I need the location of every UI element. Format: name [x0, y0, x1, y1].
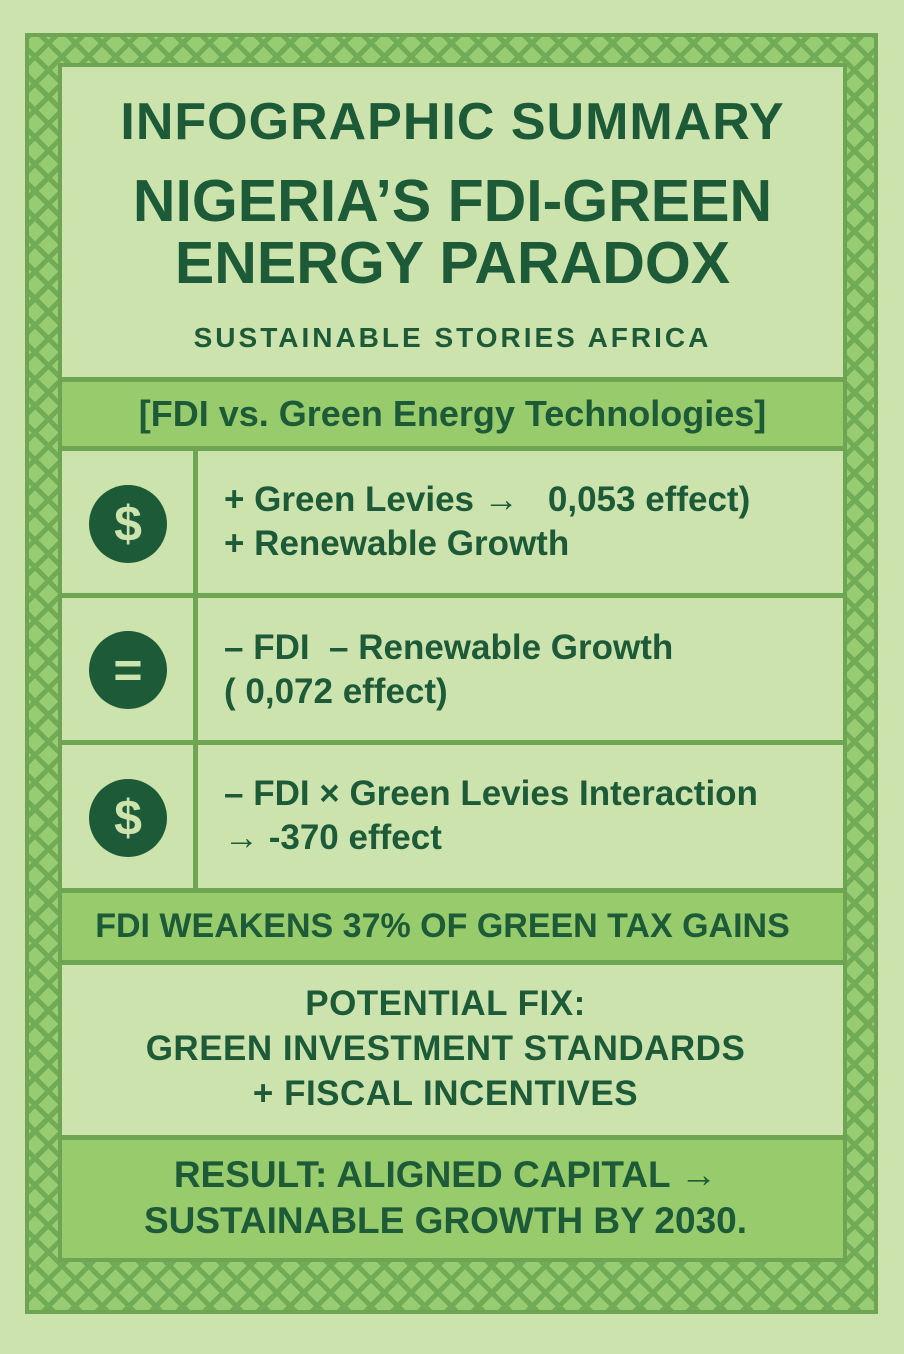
text row 3: → -370 effect [224, 818, 442, 857]
potential fix text [146, 984, 745, 1113]
text row 1: + Renewable Growth [224, 524, 569, 563]
heading: main title: NIGERIA’S FDI-GREEN [133, 168, 772, 234]
subtitle: SUSTAINABLE STORIES AFRICA [194, 322, 711, 353]
text row 2: ( 0,072 effect) [224, 672, 448, 711]
icon: dollar [89, 779, 167, 857]
text row 2 [224, 628, 673, 711]
main panel [58, 63, 847, 1262]
text row 1: + Green Levies → 0,053 effect) [224, 480, 750, 519]
heading: infographic summary: INFOGRAPHIC SUMMARY [120, 93, 785, 151]
result band: SUSTAINABLE GROWTH BY 2030. [144, 1200, 747, 1241]
text row 3 [224, 774, 758, 857]
callout: FDI weakens: FDI WEAKENS 37% OF GREEN TAX GAINS [95, 907, 790, 945]
heading: main title [133, 168, 772, 296]
potential fix text: + FISCAL INCENTIVES [253, 1074, 638, 1113]
icon: dollar [89, 485, 167, 563]
title block [120, 93, 785, 353]
row 3 [89, 774, 758, 857]
header band [62, 382, 843, 446]
icon: equals [89, 631, 167, 709]
text row 2: – FDI – Renewable Growth [224, 628, 673, 667]
row 1 [89, 480, 750, 563]
potential fix text: POTENTIAL FIX: [305, 984, 586, 1023]
potential fix text: GREEN INVESTMENT STANDARDS [146, 1029, 745, 1068]
icon: dollar: $ [114, 790, 142, 846]
text row 1 [224, 480, 750, 563]
header band: [FDI vs. Green Energy Technologies] [139, 393, 766, 434]
icon: dollar: $ [114, 496, 142, 552]
text row 3: – FDI × Green Levies Interaction [224, 774, 758, 813]
icon: equals: = [113, 642, 143, 698]
result band: RESULT: ALIGNED CAPITAL → [174, 1154, 717, 1195]
result band [62, 1140, 843, 1258]
row 2 [89, 628, 673, 711]
heading: main title: ENERGY PARADOX [175, 230, 730, 296]
callout: FDI weakens [62, 893, 843, 960]
